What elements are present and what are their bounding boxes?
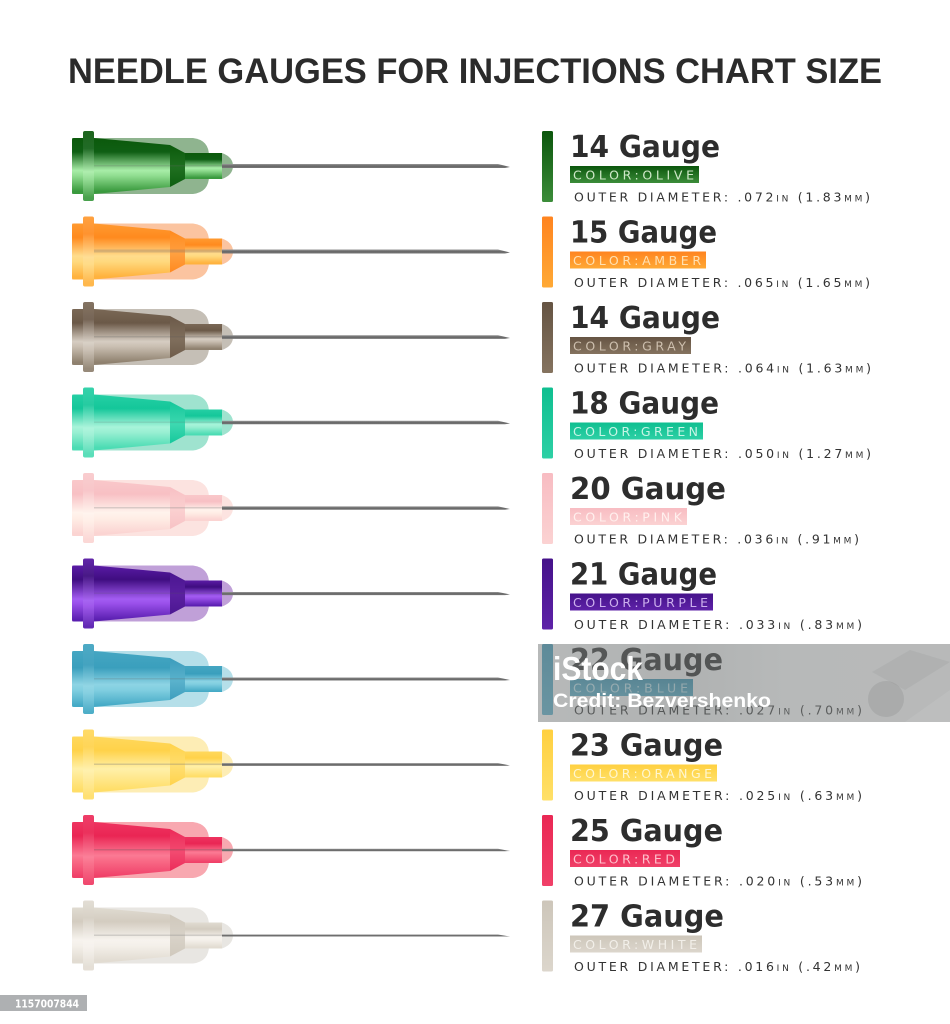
outer diameter: OUTER DIAMETER: .020 IN (.53 MM) [574,874,862,888]
icon: green needle [72,388,510,458]
icon: blue needle [72,644,510,714]
color bar [542,216,553,288]
color label: COLOR:BLUE [573,680,688,696]
color bar [542,302,553,373]
color label: COLOR:PURPLE [573,595,708,610]
color bar [542,730,553,800]
color bar [542,131,553,202]
icon: olive needle [72,131,510,201]
color label: COLOR:OLIVE [573,168,694,182]
icon: white needle [72,900,510,970]
outer diameter: OUTER DIAMETER: .036 IN (.91 MM) [574,532,859,546]
outer diameter: OUTER DIAMETER: .033 IN (.83 MM) [574,617,862,632]
image id tag [0,995,87,1011]
color bar [542,815,553,886]
icon: red needle [72,815,510,885]
row: 14 gauge olive [72,130,870,204]
icon: amber needle [72,216,510,286]
outer diameter: OUTER DIAMETER: .025 IN (.63 MM) [574,788,862,803]
color label: COLOR:AMBER [573,253,701,268]
color label: COLOR:PINK [573,510,683,524]
outer diameter: OUTER DIAMETER: .050 IN (1.27 MM) [574,446,871,461]
row: 20 gauge pink [72,472,859,546]
heading: 21 Gauge [570,558,717,592]
color bar [542,388,553,458]
heading: 14 Gauge [570,130,720,165]
heading: 27 Gauge [570,900,724,934]
row: 21 gauge purple [72,558,862,632]
outer diameter: OUTER DIAMETER: .072 IN (1.83 MM) [574,190,870,204]
color label: COLOR:RED [573,852,675,866]
watermark overlay [538,644,950,722]
icon: purple needle [72,558,510,628]
row: 22 gauge blue [72,643,862,718]
color label: COLOR:GREEN [573,424,698,439]
outer diameter: OUTER DIAMETER: .065 IN (1.65 MM) [574,275,870,290]
heading: 14 Gauge [570,301,720,336]
watermark logo: iStock [553,650,644,687]
title: NEEDLE GAUGES FOR INJECTIONS CHART SIZE [68,52,882,91]
heading: 23 Gauge [570,728,723,764]
color label: COLOR:GRAY [573,338,686,354]
outer diameter: OUTER DIAMETER: .064 IN (1.63 MM) [574,360,871,376]
heading: 25 Gauge [570,814,723,849]
color bar [542,644,553,715]
icon: pink needle [72,473,510,543]
row: 14 gauge gray [72,301,871,376]
heading: 22 Gauge [570,643,723,678]
icon: gray needle [72,302,510,372]
row: 25 gauge red [72,814,862,888]
row: 27 gauge white [72,900,860,974]
heading: 15 Gauge [570,216,717,250]
color bar [542,558,553,630]
row: 18 gauge green [72,386,871,461]
icon: yellow needle [72,730,510,800]
row: 23 gauge orange [72,728,862,803]
watermark credit: Credit: Bezvershenko [553,691,771,712]
color bar [542,900,553,972]
heading: 20 Gauge [570,472,726,507]
image id tag: 1157007844 [15,998,79,1010]
outer diameter: OUTER DIAMETER: .027 IN (.70 MM) [574,702,862,718]
color bar [542,473,553,544]
outer diameter: OUTER DIAMETER: .016 IN (.42 MM) [574,959,860,974]
row: 15 gauge amber [72,216,870,290]
heading: 18 Gauge [570,386,719,422]
color label: COLOR:ORANGE [573,766,712,781]
color label: COLOR:WHITE [573,937,697,952]
